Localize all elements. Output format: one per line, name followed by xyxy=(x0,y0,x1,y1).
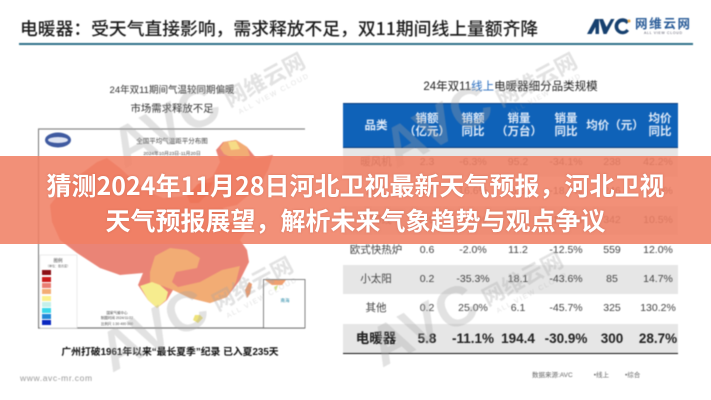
table header row: 同比 xyxy=(648,126,672,138)
map title: 全国平均气温距平分布图 xyxy=(136,136,208,145)
row 2: -18.7% xyxy=(549,185,583,197)
map credit xyxy=(101,310,133,326)
row: 其他: 6.1 xyxy=(511,302,525,314)
watermark bottom left xyxy=(88,229,303,384)
table header row: 同比 xyxy=(554,126,578,138)
row 3: 踢脚线 xyxy=(360,214,392,226)
website url: www.avc-mr.com xyxy=(20,373,93,383)
row: 其他: -45.7% xyxy=(549,302,583,314)
watermark top left: AVC xyxy=(100,70,230,180)
row: 暖风机: 95.2 xyxy=(508,156,528,168)
map caption: 广州打破1961年以来“最长夏季”纪录 已入夏235天 xyxy=(61,347,279,358)
table header row: （亿元） xyxy=(404,126,450,138)
row 3: 0.9 xyxy=(420,214,434,226)
watermark top right: 网维云网 xyxy=(492,48,581,112)
AVC logo xyxy=(586,16,690,36)
row: 欧式快热炉: -2.0% xyxy=(459,244,487,256)
table header row: 销额 xyxy=(416,113,438,125)
row 2: 6.5 xyxy=(511,185,525,197)
table header row: 销额 xyxy=(462,113,484,125)
row 2: 油汀 xyxy=(366,185,386,197)
row: 欧式快热炉 xyxy=(350,244,674,256)
row: 暖风机 xyxy=(343,148,678,177)
watermark top right: ALL VIEW CLOUD xyxy=(509,72,583,116)
row: 电暖器 total: -11.1% xyxy=(452,331,494,346)
table header row: 销量 xyxy=(508,113,530,125)
watermark top right: AVC xyxy=(372,70,502,180)
row: 其他: 130.2% xyxy=(640,302,676,314)
row: 其他: 25.0% xyxy=(458,302,488,314)
row: 电暖器 total: 28.7% xyxy=(639,331,677,346)
table heading: 24年双11线上电暖器细分品类规模 xyxy=(423,81,598,93)
row: 小太阳: -35.3% xyxy=(456,273,490,285)
table header row: 均价 xyxy=(648,113,672,125)
row: 其他 xyxy=(366,302,676,314)
legend: 图例 xyxy=(54,257,63,264)
watermark top left: ALL VIEW CLOUD xyxy=(237,72,311,116)
title line 2: 天气预报展望，解析未来气象趋势与观点争议 xyxy=(105,202,606,238)
map emblem xyxy=(45,132,71,148)
row: 其他: 其他 xyxy=(366,302,386,314)
row: 其他: 0.2 xyxy=(420,302,434,314)
table xyxy=(342,102,679,355)
row 2: 1.6 xyxy=(420,185,434,197)
row: 欧式快热炉: 0.6 xyxy=(420,244,434,256)
row: 小太阳: -43.6% xyxy=(549,273,583,285)
table header row: （万台） xyxy=(496,126,542,138)
row: 电暖器 total: -30.9% xyxy=(545,331,587,346)
row: 暖风机: 238 xyxy=(603,156,621,168)
row 3: 342 xyxy=(603,214,621,226)
watermark bottom left: 网维云网 xyxy=(208,252,297,316)
row 3: 27.4 xyxy=(508,214,528,226)
map panel subheading: 市场需求释放不足 xyxy=(130,104,214,115)
row: 电暖器 total: 300 xyxy=(601,331,623,346)
row 3 xyxy=(343,206,678,235)
South China Sea inset xyxy=(264,0,309,328)
China map shape xyxy=(50,140,273,323)
row: 电暖器 total xyxy=(343,324,678,354)
slide heading: 电暖器：受天气直接影响，需求释放不足，双11期间线上量额齐降 xyxy=(20,15,538,41)
South China Sea inset: 南海 xyxy=(280,297,290,304)
row: 暖风机: 2.3 xyxy=(420,156,434,168)
row: 小太阳: 14.7% xyxy=(643,273,673,285)
row: 电暖器 total: 5.8 xyxy=(418,331,436,346)
table header row: 同比 xyxy=(462,126,484,138)
row: 暖风机: -6.3% xyxy=(459,156,487,168)
row: 暖风机: -34.1% xyxy=(549,156,583,168)
legend: （单位：摄氏度） xyxy=(46,263,70,268)
AVC logo: ALL VIEW CLOUD xyxy=(644,31,682,35)
row: 电暖器 total: 194.4 xyxy=(501,331,535,346)
row: 电暖器 total: 电暖器 xyxy=(356,331,396,346)
row: 暖风机: 42.2% xyxy=(643,156,673,168)
row: 小太阳 xyxy=(343,265,678,294)
table header row: 品类 xyxy=(364,120,388,132)
map credit: 国家气候中心 xyxy=(106,310,128,315)
row 2: 43.0% xyxy=(643,185,673,197)
row: 欧式快热炉: 12.0% xyxy=(643,244,673,256)
map title xyxy=(136,136,208,157)
row: 欧式快热炉: -12.5% xyxy=(549,244,583,256)
row: 欧式快热炉: 欧式快热炉 xyxy=(350,244,402,256)
map frame xyxy=(38,129,305,328)
row: 暖风机: 暖风机 xyxy=(360,156,392,168)
legend xyxy=(40,255,77,328)
table header row xyxy=(343,103,678,148)
watermark top left: 网维云网 xyxy=(220,48,309,112)
table header row: 均价（元） xyxy=(586,120,644,132)
row: 其他: 325 xyxy=(603,302,621,314)
row 2: 246 xyxy=(603,185,621,197)
watermark bottom right: 网维云网 xyxy=(478,247,567,311)
watermark bottom right xyxy=(358,224,573,379)
watermark top right xyxy=(372,25,587,180)
table header row: 销量 xyxy=(554,113,578,125)
title line 1: 猜测2024年11月28日河北卫视最新天气预报，河北卫视 xyxy=(46,167,664,203)
row 3: -18.5% xyxy=(549,214,583,226)
row 3: 10.5% xyxy=(643,214,673,226)
watermark bottom right: AVC xyxy=(358,269,488,379)
watermark bottom left: AVC xyxy=(88,274,218,384)
map panel heading: 24年双11期间气温较同期偏暖 xyxy=(110,85,234,96)
row: 小太阳: 18.1 xyxy=(508,273,528,285)
title banner xyxy=(0,156,711,244)
row 2 xyxy=(366,185,673,197)
row: 欧式快热炉: 559 xyxy=(603,244,621,256)
row: 小太阳: 0.2 xyxy=(420,273,434,285)
row: 小太阳: 85 xyxy=(606,273,618,285)
data source note: 数据来源:AVC •线上 •综合 xyxy=(532,372,640,379)
map credit: 比例尺 1:30 400 000 xyxy=(101,321,133,326)
map credit: 制图时间 2024/11/22 xyxy=(101,315,133,320)
watermark top left xyxy=(100,25,315,180)
temperature anomaly map xyxy=(37,128,306,330)
watermark bottom right: ALL VIEW CLOUD xyxy=(495,271,569,315)
row: 小太阳: 小太阳 xyxy=(360,273,392,285)
row 2: 16.6% xyxy=(458,185,488,197)
watermark bottom left: ALL VIEW CLOUD xyxy=(225,276,299,320)
row: 欧式快热炉: 11.2 xyxy=(508,244,528,256)
map title: 2024年10月23日-11月20日 xyxy=(143,150,201,157)
row 3: -9.0% xyxy=(459,214,487,226)
